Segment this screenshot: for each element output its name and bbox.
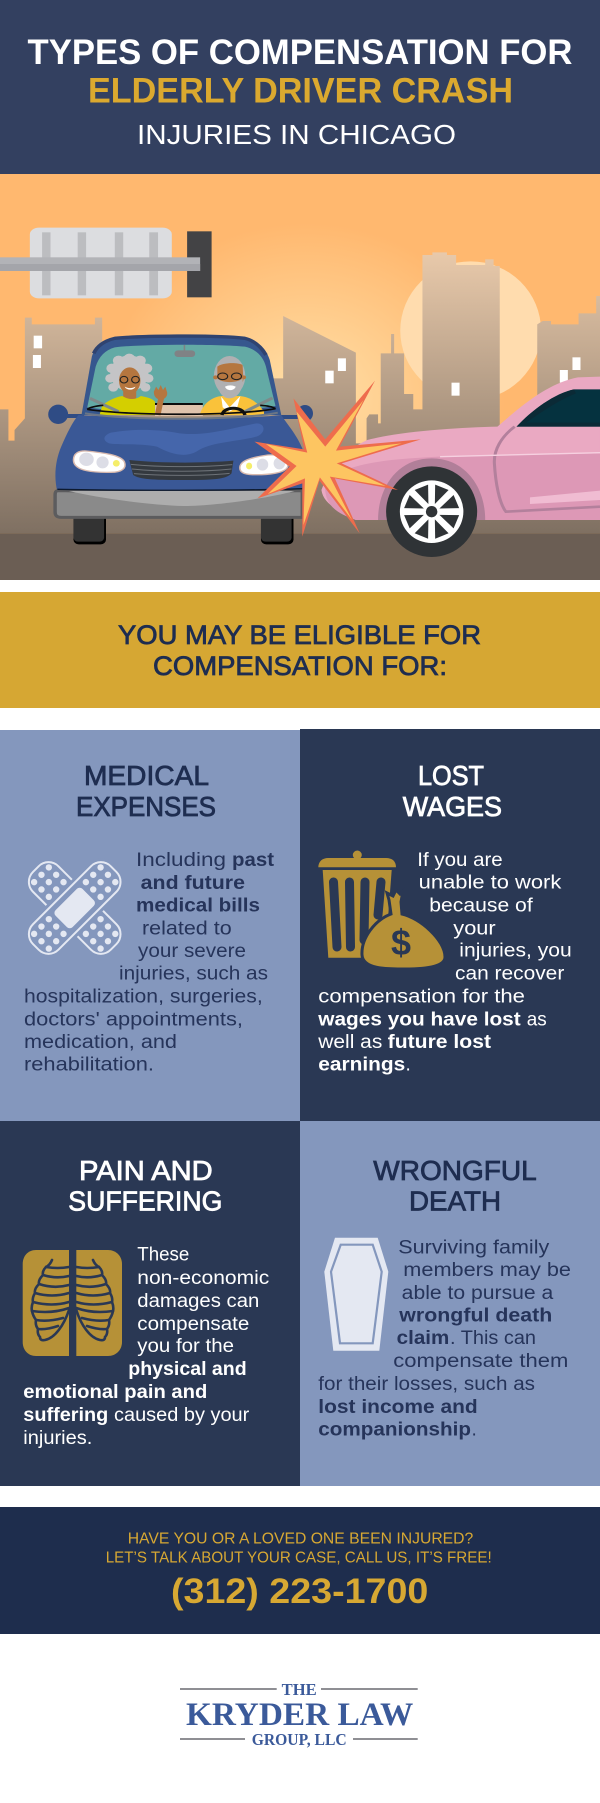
hood highlight xyxy=(104,423,264,455)
text: wrongful death body: lost income and xyxy=(318,1397,478,1418)
text: lost wages body: can recover xyxy=(455,964,565,985)
heading: lost wages: LOST xyxy=(418,760,484,791)
text: lost wages body: because of xyxy=(429,896,533,916)
text: lost wages body: injuries, you xyxy=(459,941,572,962)
illustration: crash scene xyxy=(0,174,600,580)
text: medical expenses body: your severe xyxy=(138,941,246,962)
text: wrongful death body: wrongful death xyxy=(398,1306,552,1327)
banner: eligibility heading xyxy=(0,592,600,708)
text: lost wages body: . xyxy=(406,1055,411,1076)
title line 1: TYPES OF COMPENSATION FOR xyxy=(28,33,572,72)
text: wrongful death body: members may be xyxy=(403,1260,571,1281)
call to action text: HAVE YOU OR A LOVED ONE BEEN INJURED? xyxy=(128,1530,473,1547)
heading: wrongful death xyxy=(373,1155,537,1217)
blue car xyxy=(48,335,313,544)
heading: wrongful death: DEATH xyxy=(409,1186,501,1217)
heading: pain and suffering: PAIN AND xyxy=(79,1155,213,1186)
heading: lost wages xyxy=(403,760,502,822)
text: medical expenses body: hospitalization, surgeries, xyxy=(24,987,263,1008)
panel: wrongful death xyxy=(300,1121,600,1486)
banner: eligibility heading: YOU MAY BE ELIGIBLE FOR xyxy=(118,620,481,650)
sun xyxy=(400,261,541,400)
text: pain and suffering body: caused by your xyxy=(114,1405,250,1426)
call to action text xyxy=(106,1530,492,1566)
text: lost wages body: If you are xyxy=(417,850,503,871)
icon: bandages xyxy=(23,856,126,960)
logo: The Kryder Law Group, LLC: THE xyxy=(282,1680,317,1699)
banner: eligibility heading: COMPENSATION FOR: xyxy=(153,651,447,681)
text: wrongful death body: . This can xyxy=(450,1328,536,1349)
logo: The Kryder Law Group, LLC xyxy=(180,1680,418,1749)
text: lost wages body: unable to work xyxy=(419,872,562,894)
text: pain and suffering body: emotional pain and xyxy=(23,1382,207,1403)
text: medical expenses body: rehabilitation. xyxy=(24,1055,154,1076)
text: lost wages body xyxy=(317,850,572,1076)
text: pain and suffering body: damages can xyxy=(137,1291,259,1312)
text: pain and suffering body xyxy=(23,1245,269,1449)
city skyline xyxy=(0,252,600,533)
text: medical expenses body: doctors' appointments, xyxy=(24,1010,243,1030)
building windows xyxy=(33,336,580,396)
text: pain and suffering body: non-economic xyxy=(137,1268,269,1289)
text: lost wages body: well as xyxy=(317,1032,382,1053)
road xyxy=(0,533,600,580)
title line 2: ELDERLY DRIVER CRASH xyxy=(88,72,513,111)
bumper xyxy=(55,489,302,517)
text: pain and suffering body: injuries. xyxy=(23,1428,92,1449)
logo: The Kryder Law Group, LLC: GROUP, LLC xyxy=(252,1730,347,1749)
icon: rib cage xyxy=(23,1250,122,1356)
text: medical expenses body: medication, and xyxy=(24,1032,177,1053)
heading: pain and suffering xyxy=(68,1155,222,1217)
text: wrongful death body: claim xyxy=(397,1328,449,1349)
windshield xyxy=(87,345,276,413)
heading: medical expenses: MEDICAL xyxy=(84,760,209,791)
interior dash xyxy=(155,405,203,416)
panel: pain and suffering xyxy=(0,1121,300,1486)
text: wrongful death body: able to pursue a xyxy=(402,1283,554,1304)
left headlight xyxy=(73,451,125,472)
hood xyxy=(55,415,304,492)
text: lost wages body: earnings xyxy=(318,1055,405,1076)
text: medical expenses body: medical bills xyxy=(136,896,260,917)
dashboard edge xyxy=(87,409,276,414)
cab xyxy=(82,335,281,415)
text: lost wages body: compensation for the xyxy=(318,987,525,1008)
impact burst xyxy=(254,381,421,537)
heading: medical expenses: EXPENSES xyxy=(76,791,216,822)
text: lost wages body: wages you have lost xyxy=(317,1010,521,1031)
text: medical expenses body: related to xyxy=(142,918,232,940)
text: pain and suffering body: physical and xyxy=(128,1359,247,1380)
text: wrongful death body xyxy=(318,1237,571,1441)
text: lost wages body: future lost xyxy=(388,1032,492,1053)
panel: lost wages xyxy=(300,729,600,1121)
header panel xyxy=(0,0,600,174)
panel: medical expenses xyxy=(0,730,300,1121)
title line 3: INJURIES IN CHICAGO xyxy=(137,119,456,150)
call to action text: LET’S TALK ABOUT YOUR CASE, CALL US, IT’S FREE! xyxy=(106,1549,492,1566)
text: medical expenses body: Including xyxy=(136,850,226,871)
icon: trash can and money bag: $ xyxy=(391,922,411,963)
seat belts xyxy=(90,398,272,412)
text: pain and suffering body: These xyxy=(137,1245,189,1266)
pink car xyxy=(321,377,600,557)
text: pain and suffering body: compensate xyxy=(137,1314,249,1335)
icon: trash can and money bag xyxy=(318,850,445,969)
man driver xyxy=(200,356,264,415)
logo: The Kryder Law Group, LLC: KRYDER LAW xyxy=(186,1697,413,1733)
road sign xyxy=(0,228,212,298)
text: pain and suffering body: suffering xyxy=(23,1405,108,1426)
text: wrongful death body: . xyxy=(472,1420,477,1441)
grille xyxy=(129,460,233,480)
right headlight xyxy=(240,455,288,475)
text: wrongful death body: Surviving family xyxy=(398,1237,550,1258)
wheel xyxy=(386,466,477,557)
text: medical expenses body: injuries, such as xyxy=(119,964,268,985)
text: lost wages body: as xyxy=(527,1010,547,1031)
icon: coffin xyxy=(324,1238,388,1351)
rear-view mirror xyxy=(174,345,195,357)
heading: lost wages: WAGES xyxy=(403,791,502,822)
heading: pain and suffering: SUFFERING xyxy=(68,1186,222,1217)
text: medical expenses body: and future xyxy=(141,873,245,894)
text: medical expenses body xyxy=(24,850,275,1076)
heading: wrongful death: WRONGFUL xyxy=(373,1155,537,1186)
text: wrongful death body: compensate them xyxy=(393,1351,568,1372)
heading: medical expenses xyxy=(76,760,216,822)
text: medical expenses body: past xyxy=(232,850,275,871)
tires xyxy=(73,513,293,544)
call to action band xyxy=(0,1507,600,1634)
text: wrongful death body: companionship xyxy=(318,1420,471,1441)
woman passenger xyxy=(99,354,167,415)
text: wrongful death body: for their losses, such as xyxy=(318,1374,535,1395)
mirrors xyxy=(48,405,313,424)
phone number: (312) 223-1700 xyxy=(171,1572,428,1611)
text: pain and suffering body: you for the xyxy=(137,1336,234,1357)
text: lost wages body: your xyxy=(453,918,496,940)
